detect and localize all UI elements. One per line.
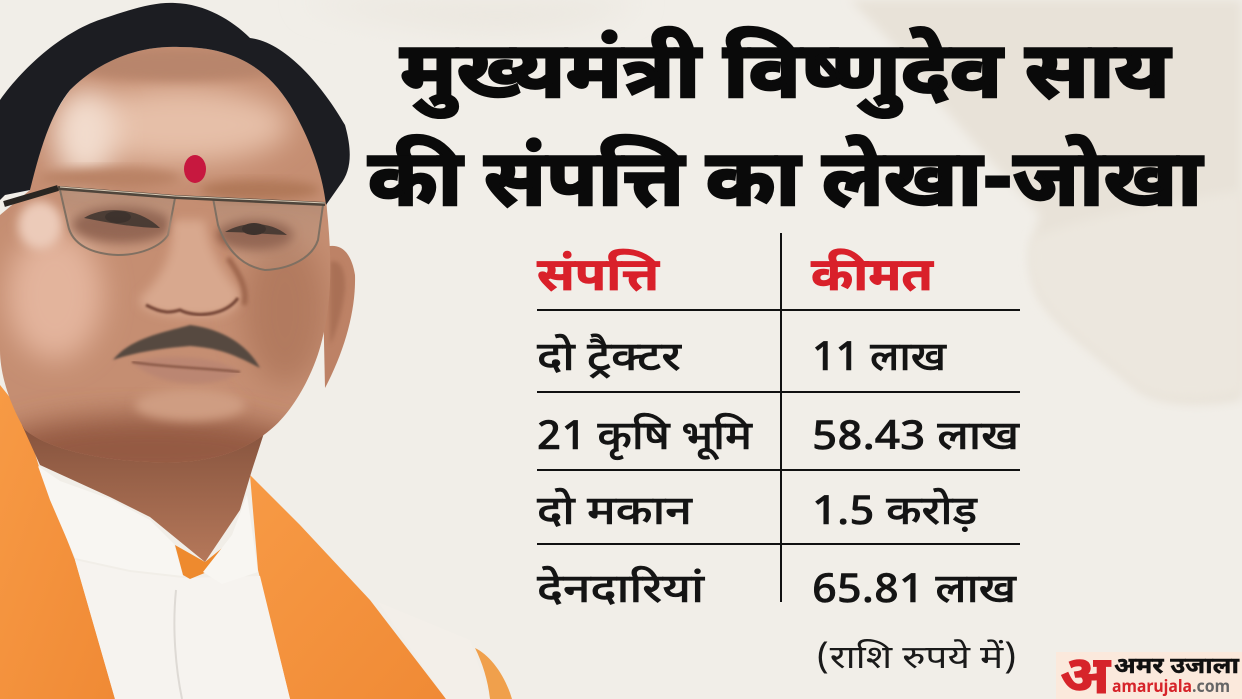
clothing: orange scarf and white kurta	[0, 385, 512, 699]
title	[368, 26, 1204, 237]
centre orange under collar	[175, 540, 232, 579]
logo: Amar Ujala: अमर उजाला	[1114, 653, 1240, 682]
row: liabilities: देनदारियां	[537, 565, 705, 619]
moustache	[113, 325, 260, 368]
row: liabilities: 65.81 लाख	[812, 567, 1017, 619]
row: agricultural land: 58.43 लाख	[812, 414, 1020, 466]
asset table	[537, 233, 1020, 619]
table header	[537, 248, 935, 309]
table lines	[537, 233, 1020, 602]
row: tractors: दो ट्रैक्टर	[537, 334, 682, 387]
right ear	[322, 246, 355, 388]
title: मुख्यमंत्री विष्णुदेव साय	[400, 26, 1172, 129]
tilak	[184, 155, 206, 183]
row: agricultural land: 21 कृषि भूमि	[537, 413, 754, 466]
face	[0, 40, 340, 485]
jaw shade	[18, 402, 284, 462]
eyes	[72, 207, 293, 250]
footnote: (राशि रुपये में)	[816, 639, 1017, 682]
far right orange edge	[475, 648, 512, 699]
left orange scarf	[0, 385, 115, 699]
logo: Amar Ujala	[1056, 647, 1242, 699]
left cheek highlight	[7, 230, 103, 360]
left ear	[0, 235, 9, 325]
kurta placket line	[174, 590, 182, 699]
right cheek	[243, 235, 327, 385]
right collar	[203, 495, 258, 584]
right orange scarf	[250, 475, 446, 699]
glasses	[4, 187, 325, 270]
table header: संपत्ति	[537, 248, 660, 309]
row: houses	[537, 488, 978, 541]
white kurta	[75, 560, 290, 699]
neck	[22, 400, 265, 562]
portrait of the chief minister	[0, 3, 512, 699]
row: tractors	[537, 334, 947, 387]
row: agricultural land	[537, 413, 1020, 466]
right white cloth	[378, 602, 490, 699]
row: liabilities	[537, 565, 1017, 619]
title: की संपत्ति का लेखा-जोखा	[368, 134, 1204, 237]
nose	[140, 220, 245, 316]
logo: Amar Ujala: amarujala.com	[1112, 677, 1230, 699]
table header: कीमत	[811, 248, 935, 309]
forehead highlight	[70, 87, 290, 163]
lips	[132, 357, 240, 384]
row: tractors: 11 लाख	[812, 335, 947, 387]
row: houses: 1.5 करोड़	[812, 488, 978, 541]
hair	[0, 3, 350, 205]
row: houses: दो मकान	[537, 488, 693, 541]
brow shading	[40, 168, 180, 188]
left collar	[38, 466, 183, 576]
